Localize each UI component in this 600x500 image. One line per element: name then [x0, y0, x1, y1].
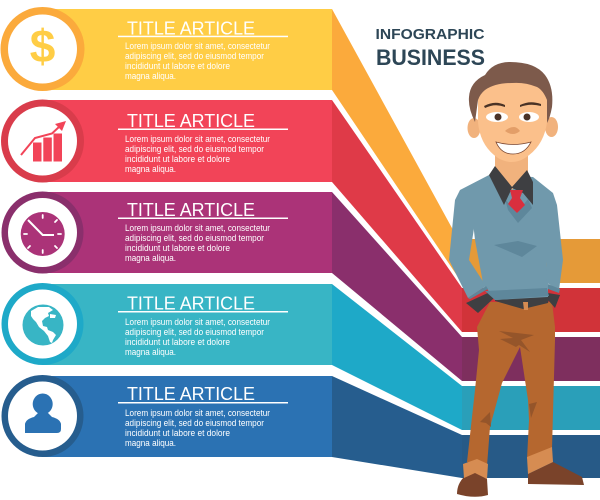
neck	[495, 150, 528, 190]
text block: purple article: Lorem ipsum dolor sit amet, consectetur	[125, 223, 270, 233]
text block: yellow article: magna aliqua.	[125, 71, 176, 81]
icon: growth chart badge	[1, 100, 84, 182]
eyes	[486, 112, 539, 122]
eyebrows	[484, 102, 541, 108]
text block: red article	[118, 111, 288, 174]
panel: blue ribbon	[42, 376, 600, 478]
heading: infographic business: BUSINESS	[376, 45, 485, 70]
text block: blue article	[118, 384, 288, 448]
text block: blue article: incididunt ut labore et dolore	[125, 428, 230, 438]
icon: dollar badge: $	[30, 20, 55, 72]
shirt collar	[489, 166, 533, 205]
hair	[469, 62, 552, 123]
text block: purple article: TITLE ARTICLE	[127, 200, 255, 220]
panel: yellow ribbon	[42, 9, 600, 283]
left sweater arm	[449, 175, 489, 298]
text block: teal article	[118, 294, 288, 357]
text block: blue article: adipiscing elit, sed do eiusmod tempor	[125, 418, 264, 428]
text block: red article: TITLE ARTICLE	[127, 111, 255, 131]
sweater shading	[468, 199, 560, 300]
shirt hem and cuffs	[466, 292, 560, 313]
left and right shoes	[457, 462, 584, 497]
text block: purple article: incididunt ut labore et dolore	[125, 243, 230, 253]
trouser creases	[480, 331, 537, 427]
text block: red article: adipiscing elit, sed do eiusmod tempor	[125, 144, 264, 154]
text block: teal article: TITLE ARTICLE	[127, 294, 255, 314]
illustration: businessman	[449, 62, 584, 497]
text block: red article: magna aliqua.	[125, 164, 176, 174]
text block: teal article: magna aliqua.	[125, 347, 176, 357]
panel: purple ribbon	[42, 192, 600, 381]
text block: red article: Lorem ipsum dolor sit amet, consectetur	[125, 134, 270, 144]
heading: infographic business: INFOGRAPHIC	[376, 27, 485, 43]
icon: dollar badge	[0, 7, 84, 91]
text block: red article: incididunt ut labore et dolore	[125, 154, 230, 164]
icon: person badge	[2, 375, 84, 457]
text block: teal article: incididunt ut labore et dolore	[125, 337, 230, 347]
icon: clock badge	[2, 192, 84, 274]
text block: yellow article: adipiscing elit, sed do eiusmod tempor	[125, 51, 264, 61]
text block: yellow article: incididunt ut labore et dolore	[125, 61, 230, 71]
text block: purple article	[118, 200, 288, 263]
nose	[505, 127, 520, 134]
face	[478, 78, 547, 162]
trousers	[467, 302, 555, 466]
text block: purple article: magna aliqua.	[125, 253, 176, 263]
text block: teal article: Lorem ipsum dolor sit amet, consectetur	[125, 317, 270, 327]
panel: red ribbon	[42, 100, 600, 332]
text block: yellow article: Lorem ipsum dolor sit amet, consectetur	[125, 41, 270, 51]
text block: teal article: adipiscing elit, sed do eiusmod tempor	[125, 327, 264, 337]
text block: purple article: adipiscing elit, sed do eiusmod tempor	[125, 233, 264, 243]
icon: globe badge	[2, 283, 84, 365]
right sweater arm	[533, 177, 563, 290]
text block: blue article: Lorem ipsum dolor sit amet, consectetur	[125, 408, 270, 418]
text block: blue article: TITLE ARTICLE	[127, 384, 255, 404]
sweater torso	[470, 175, 550, 300]
text block: yellow article: TITLE ARTICLE	[127, 18, 255, 38]
panel: teal ribbon	[42, 284, 600, 430]
text block: yellow article	[118, 18, 288, 81]
ears	[468, 117, 558, 138]
heading: infographic business	[376, 27, 485, 70]
text block: blue article: magna aliqua.	[125, 438, 176, 448]
smile	[496, 142, 531, 154]
tie	[508, 190, 525, 213]
trouser cuffs	[463, 447, 553, 479]
